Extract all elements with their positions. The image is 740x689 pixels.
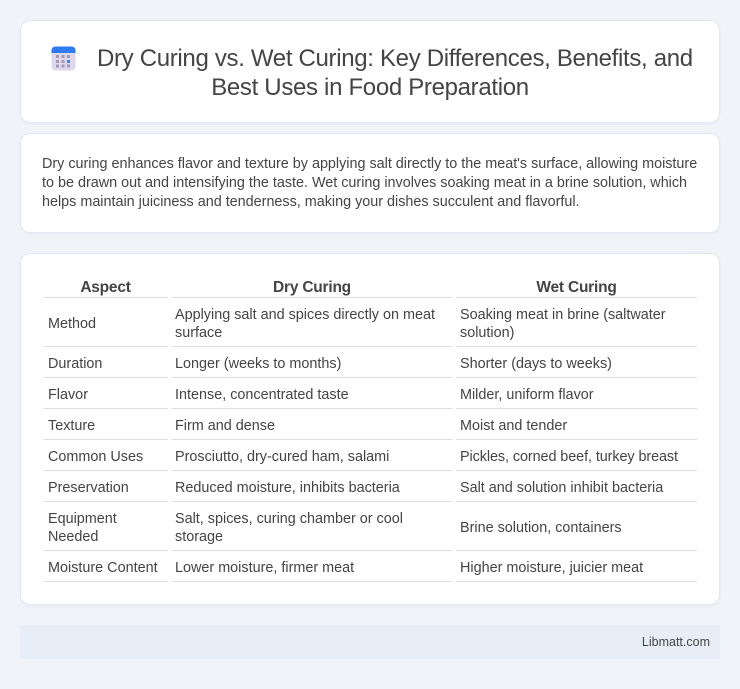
comparison table: Moist and tender [460, 418, 567, 434]
title [97, 45, 693, 101]
intro text: to be drawn out and intensifying the taste. Wet curing involves soaking meat in a brine solution, which [42, 175, 687, 191]
comparison table: storage [175, 529, 223, 545]
intro text: Dry curing enhances flavor and texture by applying salt directly to the meat's surface, allowing moisture [42, 156, 697, 172]
header panel [20, 20, 720, 123]
comparison table: Salt, spices, curing chamber or cool [175, 511, 403, 527]
comparison table: Moisture Content [48, 560, 158, 576]
comparison table: Flavor [48, 387, 88, 403]
comparison table: Wet Curing [536, 279, 617, 296]
comparison table: Firm and dense [175, 418, 275, 434]
footer credit: Libmatt.com [642, 635, 710, 649]
intro text: helps maintain juiciness and tenderness, making your dishes succulent and flavorful. [42, 194, 580, 210]
comparison table: Intense, concentrated taste [175, 387, 349, 403]
comparison table: solution) [460, 325, 514, 341]
intro text [42, 156, 697, 210]
comparison table: Soaking meat in brine (saltwater [460, 307, 666, 323]
comparison table: Longer (weeks to months) [175, 356, 341, 372]
comparison table: Method [48, 316, 96, 332]
comparison table: Texture [48, 418, 95, 434]
comparison table: Salt and solution inhibit bacteria [460, 480, 663, 496]
intro panel [20, 133, 720, 233]
table panel [20, 253, 720, 605]
icon: calendar [52, 46, 76, 70]
comparison table: Shorter (days to weeks) [460, 356, 612, 372]
comparison table: Applying salt and spices directly on meat [175, 307, 435, 323]
comparison table [43, 279, 697, 582]
comparison table: Dry Curing [273, 279, 351, 296]
comparison table: Aspect [80, 279, 131, 296]
comparison table: Equipment [48, 511, 117, 527]
comparison table: Reduced moisture, inhibits bacteria [175, 480, 400, 496]
comparison table: Duration [48, 356, 102, 372]
comparison table: Lower moisture, firmer meat [175, 560, 354, 576]
title: Dry Curing vs. Wet Curing: Key Differences, Benefits, and [97, 45, 693, 72]
title: Best Uses in Food Preparation [211, 74, 529, 101]
comparison table: Milder, uniform flavor [460, 387, 594, 403]
comparison table: surface [175, 325, 222, 341]
comparison table: Brine solution, containers [460, 520, 622, 536]
comparison table: Prosciutto, dry-cured ham, salami [175, 449, 389, 465]
comparison table: Common Uses [48, 449, 143, 465]
comparison table: Preservation [48, 480, 129, 496]
footer bar [20, 625, 720, 659]
comparison table: Higher moisture, juicier meat [460, 560, 643, 576]
comparison table: Pickles, corned beef, turkey breast [460, 449, 678, 465]
comparison table: Needed [48, 529, 98, 545]
